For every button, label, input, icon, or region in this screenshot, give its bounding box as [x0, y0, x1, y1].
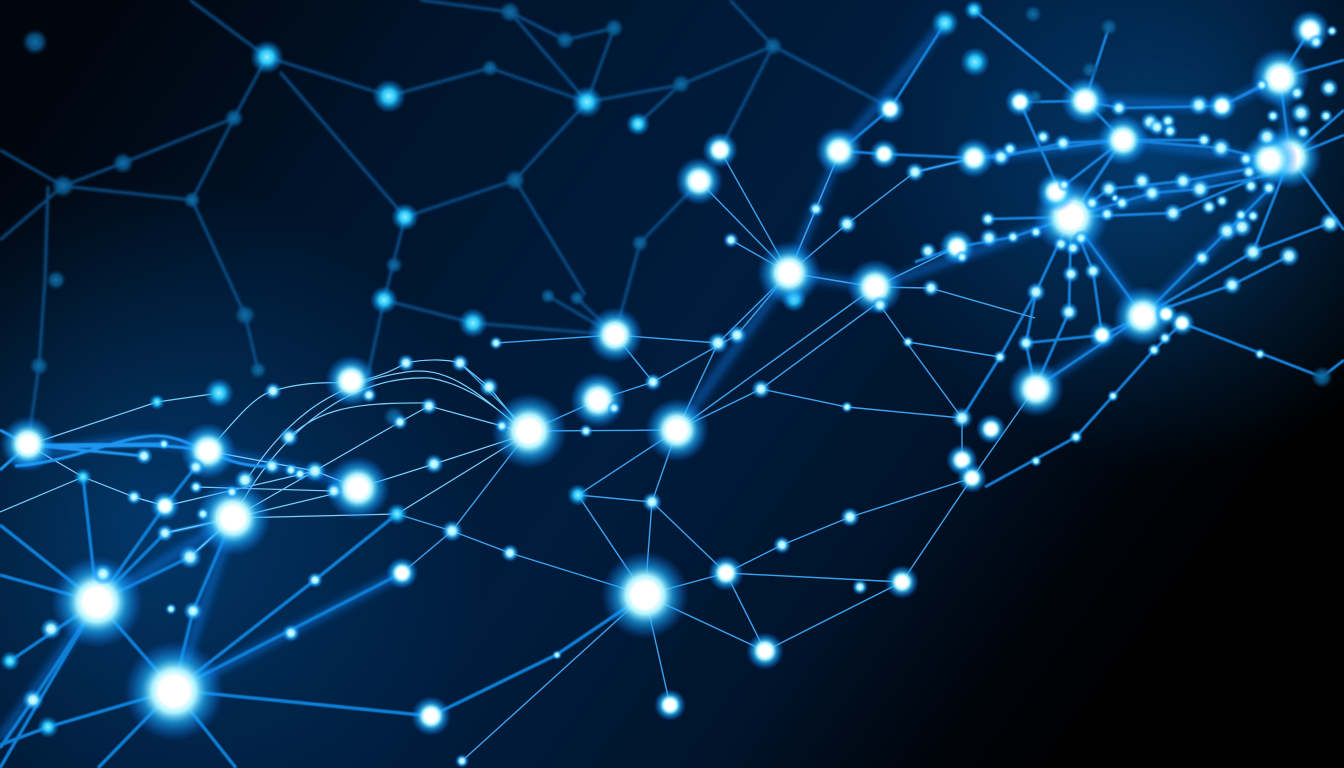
centre thin edges — [397, 150, 1035, 761]
thick foreground edges — [0, 451, 645, 768]
curved fibre strands — [0, 360, 527, 557]
medium cyan nodes — [0, 0, 990, 738]
upper right edges — [840, 10, 1344, 487]
dim background edges — [0, 0, 885, 430]
left fibre bundle — [0, 430, 272, 470]
dim nodes — [22, 1, 1333, 428]
